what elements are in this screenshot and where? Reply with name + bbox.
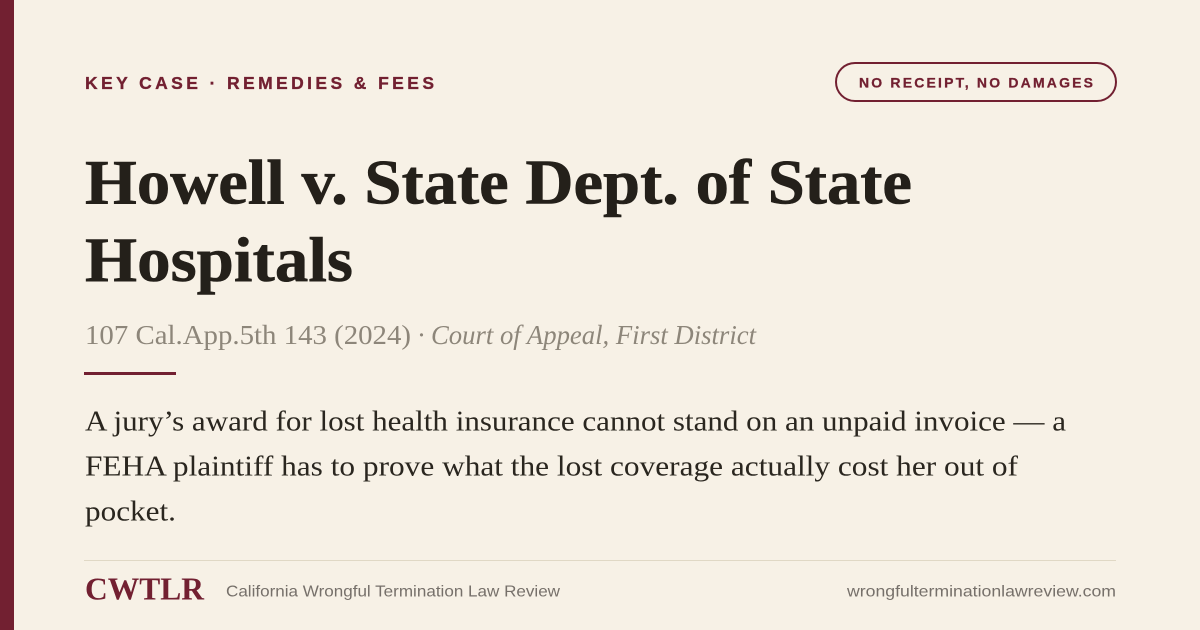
- title: Hospitals: [85, 224, 353, 295]
- title: [85, 146, 912, 295]
- summary text: [85, 406, 1066, 528]
- footer website: wrongfulterminationlawreview.com: [846, 584, 1116, 600]
- citation line: Court of Appeal, First District: [431, 320, 757, 350]
- summary text: FEHA plaintiff has to prove what the lost coverage actually cost her out of: [85, 450, 1018, 482]
- eyebrow: category label: KEY CASE · REMEDIES & FEES: [85, 73, 434, 93]
- summary text: pocket.: [85, 496, 176, 528]
- divider rule: [84, 372, 176, 375]
- footer logo: CWTLR: [85, 570, 205, 606]
- citation line: [85, 320, 757, 350]
- badge: no receipt, no damages: [836, 63, 1116, 101]
- citation line: ·: [417, 320, 426, 350]
- title: Howell v. State Dept. of State: [85, 146, 912, 218]
- badge: no receipt, no damages: NO RECEIPT, NO DAMAGES: [859, 74, 1093, 90]
- summary text: A jury’s award for lost health insurance cannot stand on an unpaid invoice — a: [85, 406, 1066, 438]
- accent bar: [0, 0, 14, 630]
- footer publication name: California Wrongful Termination Law Review: [226, 584, 560, 600]
- citation line: 107 Cal.App.5th 143 (2024): [85, 320, 411, 350]
